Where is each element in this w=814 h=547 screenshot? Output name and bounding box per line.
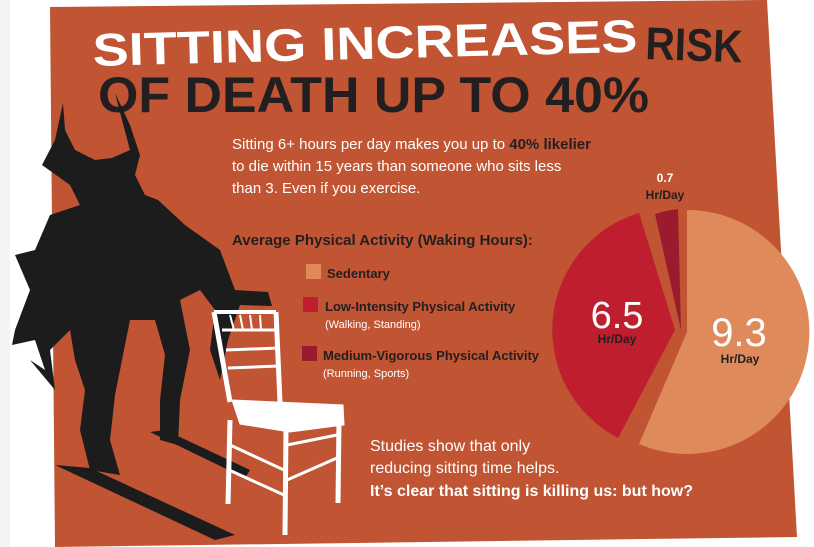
closing text: reducing sitting time helps.	[370, 460, 559, 477]
pie chart: Hr/Day	[721, 352, 760, 366]
title	[92, 10, 743, 123]
intro text	[232, 136, 591, 197]
pie chart: 6.5	[591, 295, 643, 337]
closing text	[370, 438, 693, 500]
closing text: Studies show that only	[370, 438, 530, 455]
illustration: chair	[214, 312, 344, 535]
pie chart: Hr/Day	[646, 188, 685, 202]
closing text: It’s clear that sitting is killing us: but how?	[370, 483, 693, 500]
title: RISK	[645, 17, 743, 72]
intro text: Sitting 6+ hours per day makes you up to 40% likelier	[232, 136, 591, 153]
pie chart: 0.7	[657, 171, 674, 185]
legend: Average Physical Activity (Waking Hours):	[232, 232, 533, 249]
pie chart: Hr/Day	[598, 332, 637, 346]
pie chart: 9.3	[711, 311, 767, 355]
title: SITTING INCREASES	[92, 10, 638, 76]
intro text: to die within 15 years than someone who sits less	[232, 158, 561, 175]
legend: (Running, Sports)	[323, 368, 409, 380]
pie chart	[552, 171, 809, 454]
legend	[232, 232, 540, 380]
intro text: than 3. Even if you exercise.	[232, 180, 420, 197]
legend: Medium-Vigorous Physical Activity	[323, 348, 540, 363]
legend: Sedentary	[327, 266, 391, 281]
legend: Low-Intensity Physical Activity	[325, 299, 516, 314]
legend: (Walking, Standing)	[325, 319, 421, 331]
title: OF DEATH UP TO 40%	[98, 67, 649, 123]
illustration: demon	[12, 93, 272, 540]
